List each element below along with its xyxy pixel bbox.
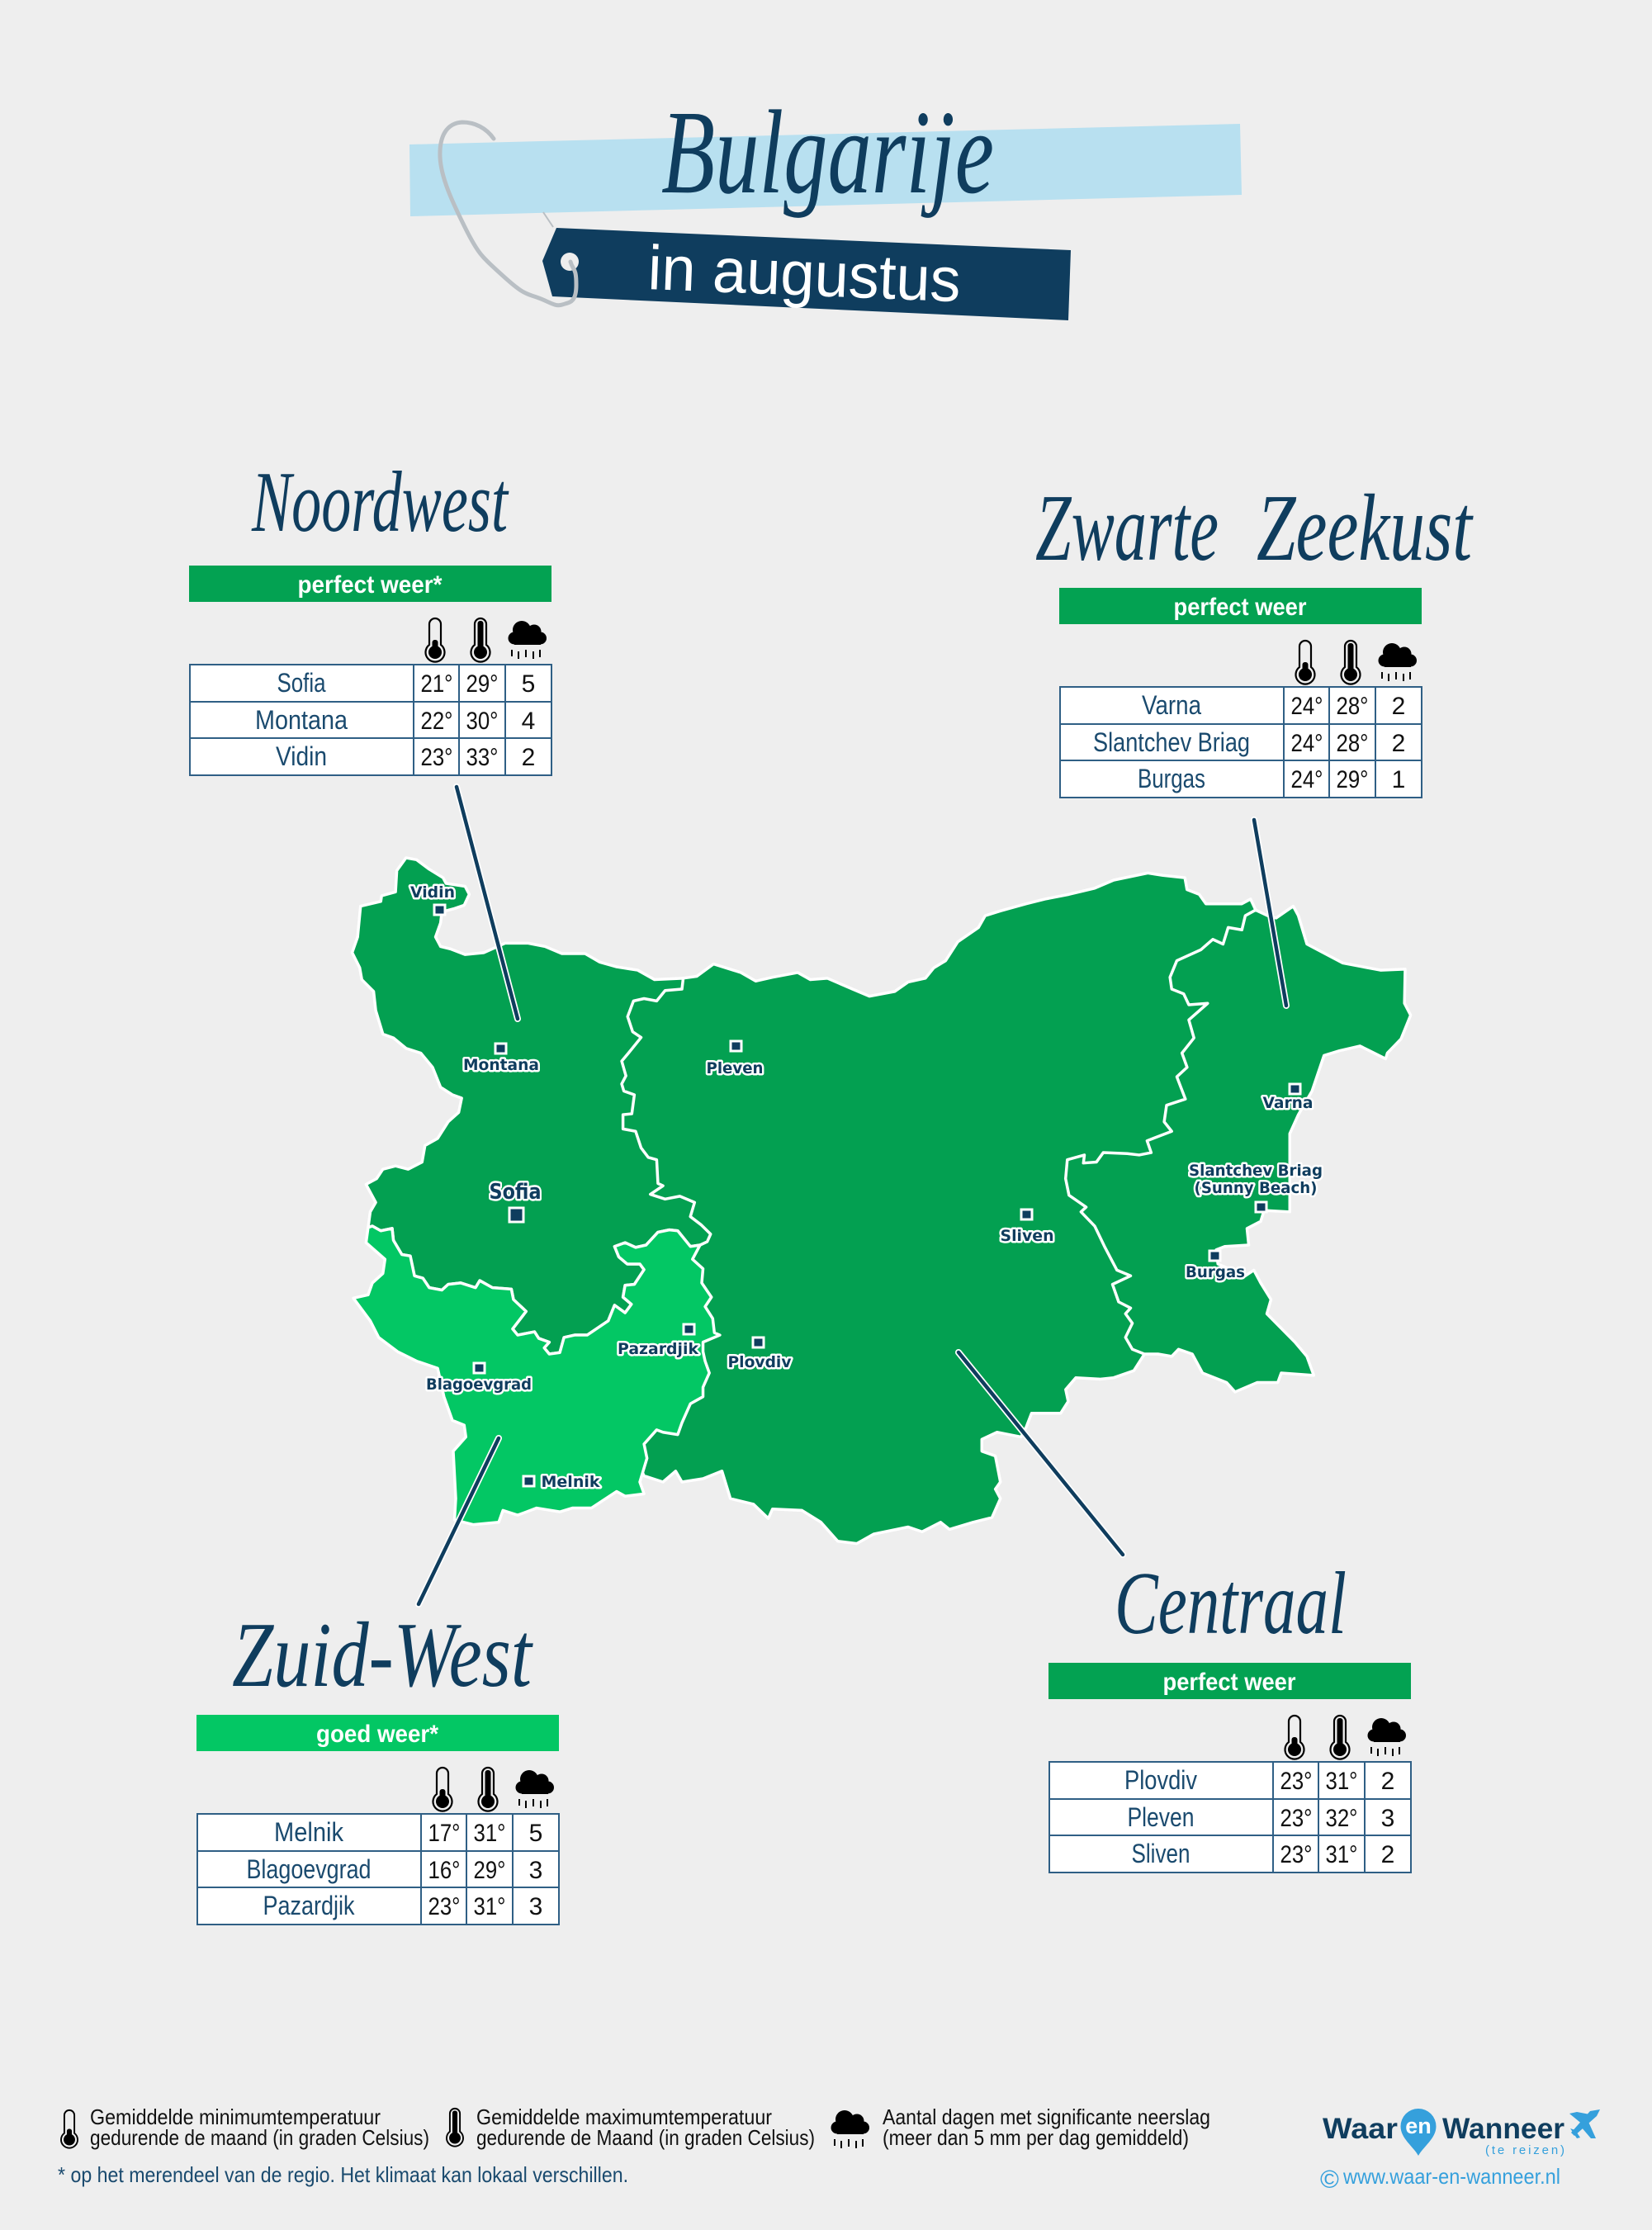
city markers and labels [410, 883, 1323, 1491]
table: Centraal: 23° [1280, 1768, 1313, 1795]
icon: max temperature [471, 618, 490, 662]
banner: perfect weer [1048, 1663, 1411, 1699]
table: Zuid-West: 31° [474, 1893, 505, 1920]
icon: airplane [1569, 2109, 1600, 2138]
heading: Noordwest: Noordwest [251, 453, 509, 550]
table: Zuid-West: Blagoevgrad [246, 1854, 372, 1884]
table: Noordwest: 29° [466, 670, 499, 698]
legend text: maximum temperature: gedurende de Maand (in graden Celsius) [476, 2125, 815, 2150]
logo: Waar en Wanneer [1320, 2109, 1600, 2194]
table: Zwarte Zeekust [1060, 687, 1422, 798]
table: Noordwest [190, 665, 551, 775]
heading: Centraal: Centraal [1115, 1555, 1347, 1653]
banner: perfect weer [189, 566, 551, 602]
table: Zwarte Zeekust: 28° [1336, 730, 1369, 757]
table: Centraal: 31° [1326, 1768, 1357, 1795]
table: Noordwest: 2 [522, 744, 535, 771]
label: Sofia: Sofia [489, 1180, 542, 1205]
table: Zwarte Zeekust: Burgas [1138, 764, 1205, 793]
label: Pazardjik: Pazardjik [618, 1340, 698, 1358]
marker: Montana [495, 1044, 506, 1053]
icon: legend min temperature [61, 2110, 78, 2148]
panel body [1059, 588, 1422, 798]
icon: min temperature [426, 618, 444, 662]
table: Centraal: 32° [1326, 1805, 1357, 1832]
table: Noordwest: 4 [522, 708, 535, 735]
legend text: rain days: Aantal dagen met significante neerslag [883, 2105, 1210, 2129]
table: Zwarte Zeekust: 2 [1392, 730, 1405, 757]
legend [58, 2105, 1210, 2187]
heading: Zuid-West: Zuid-West [232, 1604, 533, 1707]
legend text: minimum temperature: gedurende de maand (in graden Celsius) [90, 2125, 429, 2150]
footnote: * op het merendeel van de regio. Het klimaat kan lokaal verschillen. [58, 2162, 628, 2187]
heading: Zwarte Zeekust: Zeekust [1257, 476, 1474, 580]
panel: Centraal [1048, 1555, 1411, 1873]
title: Bulgarije: Bulgarije [661, 87, 994, 219]
map of Bulgaria [353, 858, 1411, 1544]
pointer line: Zwarte Zeekust [1254, 820, 1286, 1006]
region: Noordwest [353, 858, 711, 1354]
label: Melnik: Melnik [542, 1473, 600, 1491]
table: Centraal: 23° [1280, 1805, 1313, 1832]
panel: Noordwest [189, 453, 551, 775]
table: Centraal: 23° [1280, 1841, 1313, 1868]
pointer line: Zuid-West [419, 1438, 499, 1604]
icon: min temperature [1296, 641, 1314, 684]
label: Vidin: Vidin [410, 883, 455, 902]
legend text: maximum temperature: Gemiddelde maximumtemperatuur [476, 2105, 772, 2129]
table: Centraal: Pleven [1128, 1802, 1194, 1832]
table: Noordwest: 22° [421, 708, 452, 735]
panel body [196, 1715, 559, 1925]
navy label tag [542, 228, 1071, 320]
table: Zuid-West: 16° [428, 1857, 461, 1884]
banner: goed weer [196, 1715, 559, 1751]
label: Sunny Beach: (Sunny Beach) [1194, 1179, 1318, 1197]
table: Zuid-West: 3 [529, 1893, 542, 1920]
table: Centraal: 3 [1381, 1805, 1394, 1832]
pointer line: Noordwest [457, 787, 518, 1019]
table: Noordwest: Sofia [277, 668, 326, 698]
legend text: maximum temperature [476, 2105, 815, 2150]
label: Burgas: Burgas [1186, 1263, 1245, 1281]
table: Centraal: 2 [1381, 1768, 1394, 1795]
copyright sign: © [1320, 2165, 1339, 2194]
marker: Burgas [1209, 1251, 1220, 1261]
icon: min temperature [433, 1768, 452, 1811]
marker: Pazardjik [684, 1324, 694, 1334]
marker: Sofia [509, 1208, 523, 1222]
marker: Melnik [523, 1476, 534, 1486]
icon: max temperature [479, 1768, 497, 1811]
table: Zuid-West: Melnik [274, 1817, 344, 1847]
label: Pleven: Pleven [707, 1059, 763, 1077]
banner: goed weer: goed weer* [316, 1721, 438, 1748]
legend text: rain days: (meer dan 5 mm per dag gemiddeld) [883, 2125, 1189, 2150]
table: Zuid-West: 3 [529, 1857, 542, 1884]
marker: Varna [1290, 1084, 1300, 1094]
table: Noordwest: Montana [255, 705, 348, 735]
light blue title strip [409, 124, 1242, 216]
logo word: Wanneer: Wanneer [1442, 2113, 1564, 2145]
subtitle: in augustus: in augustus [646, 233, 962, 315]
title block [409, 87, 1242, 320]
table: Centraal [1049, 1762, 1411, 1873]
table: Centraal: 2 [1381, 1841, 1394, 1868]
region: Zuid-West [353, 1226, 720, 1525]
banner: perfect weer [1059, 588, 1422, 624]
table: Noordwest: 33° [466, 744, 499, 771]
table: Zwarte Zeekust: Slantchev Briag [1093, 727, 1250, 757]
icon: legend max temperature [447, 2109, 463, 2147]
table: Centraal: 31° [1326, 1841, 1357, 1868]
label: Montana: Montana [463, 1056, 539, 1074]
panel: Zuid-West [196, 1604, 559, 1925]
table: Zwarte Zeekust: 2 [1392, 693, 1405, 720]
table: Zuid-West: 23° [428, 1893, 461, 1920]
icon: rain [509, 621, 547, 659]
table: Noordwest: 30° [466, 708, 499, 735]
panel: Zwarte Zeekust [1035, 476, 1474, 798]
table: Noordwest: 23° [421, 744, 452, 771]
icon: rain [1379, 643, 1417, 681]
table: Zuid-West: 31° [474, 1820, 505, 1847]
icon: rain [1367, 1718, 1406, 1756]
table: Zwarte Zeekust: 24° [1291, 693, 1323, 720]
tag hole [561, 253, 579, 271]
table: Zuid-West: 5 [529, 1820, 542, 1847]
region: Centraal [583, 873, 1256, 1544]
table: Zwarte Zeekust: 28° [1336, 693, 1369, 720]
logo pin [1400, 2109, 1437, 2156]
heading: Zwarte Zeekust [1035, 476, 1474, 580]
table: Zuid-West: 29° [474, 1857, 505, 1884]
icon: max temperature [1331, 1716, 1349, 1759]
marker: Vidin [434, 905, 445, 915]
table: Zwarte Zeekust: 1 [1392, 766, 1405, 793]
icon: min temperature [1285, 1716, 1304, 1759]
pointer line: Centraal [959, 1352, 1123, 1555]
marker: Plovdiv [753, 1338, 764, 1347]
label: Plovdiv: Plovdiv [728, 1353, 792, 1371]
website: www.waar-en-wanneer.nl [1342, 2164, 1560, 2189]
table: Zuid-West: Pazardjik [263, 1891, 355, 1920]
table: Centraal: Plovdiv [1124, 1765, 1197, 1795]
tag string loop [440, 122, 576, 305]
label: Blagoevgrad: Blagoevgrad [426, 1375, 532, 1394]
label: Slantchev Briag: Slantchev Briag [1189, 1162, 1323, 1180]
table: Zuid-West [197, 1814, 559, 1925]
panel body [1048, 1663, 1411, 1873]
banner: perfect weer: perfect weer [1174, 594, 1307, 621]
table: Noordwest: 21° [421, 670, 452, 698]
marker: Slantchev Briag [1256, 1202, 1266, 1212]
logo word: Waar: Waar [1323, 2113, 1398, 2145]
marker: Sliven [1021, 1210, 1032, 1219]
heading: Zwarte Zeekust: Zwarte [1035, 476, 1219, 580]
label: Varna: Varna [1263, 1094, 1313, 1112]
banner: perfect weer: perfect weer [1162, 1669, 1296, 1696]
table: Noordwest: 5 [522, 670, 535, 698]
icon: legend rain [831, 2110, 869, 2148]
banner: perfect weer: perfect weer* [297, 571, 443, 599]
logo tagline: (te reizen) [1485, 2143, 1564, 2157]
table: Zwarte Zeekust: 29° [1336, 766, 1369, 793]
table: Noordwest: Vidin [276, 741, 327, 771]
icon: rain [515, 1770, 554, 1808]
logo word: en: en [1405, 2114, 1432, 2138]
short string piece [543, 212, 553, 227]
region: Zwarte Zeekust [1066, 907, 1411, 1392]
icon: max temperature [1341, 641, 1361, 684]
marker: Pleven [731, 1041, 741, 1051]
table: Zuid-West: 17° [428, 1820, 461, 1847]
marker: Blagoevgrad [474, 1363, 485, 1373]
table: Zwarte Zeekust: Varna [1142, 690, 1201, 720]
table: Zwarte Zeekust: 24° [1291, 766, 1323, 793]
label: Sliven: Sliven [1001, 1227, 1053, 1245]
legend text: minimum temperature [90, 2105, 429, 2150]
table: Zwarte Zeekust: 24° [1291, 730, 1323, 757]
legend text: rain days [883, 2105, 1210, 2150]
legend text: minimum temperature: Gemiddelde minimumtemperatuur [90, 2105, 381, 2129]
table: Centraal: Sliven [1131, 1839, 1190, 1868]
